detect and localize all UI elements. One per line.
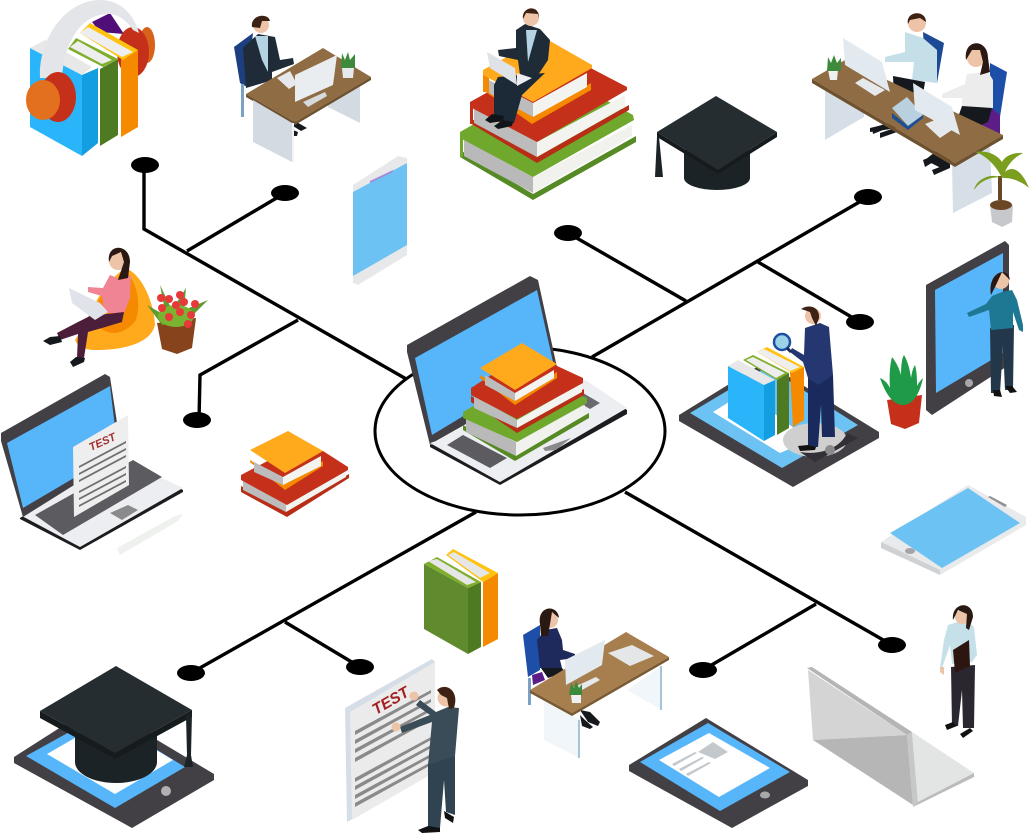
icon: standing woman with folder [940, 605, 977, 738]
icon: graduation cap [655, 96, 777, 190]
icon: test board with man [345, 659, 459, 833]
potted palm [974, 152, 1029, 227]
icon: graduation cap on tablet [14, 666, 214, 828]
icon: open laptop back [807, 667, 974, 807]
blue book [30, 40, 98, 156]
icon: big tablet with woman [926, 241, 1023, 415]
headband [40, 0, 139, 78]
orange book [483, 37, 592, 124]
icon: small book stack [241, 431, 349, 517]
icon: tablet with document [629, 718, 808, 828]
icon: plant in red pot [880, 355, 923, 429]
upright books [728, 347, 804, 441]
icon: book stack with reader [460, 8, 636, 200]
network connector lines [144, 165, 892, 673]
icon: potted flowers [147, 285, 208, 354]
icon: upright books green and orange [424, 549, 498, 654]
text: TEST on sheet: TEST [87, 431, 119, 454]
icon: smartphone upright [353, 156, 407, 285]
text: TEST on board: TEST [370, 683, 414, 718]
green book [460, 75, 636, 200]
icon: two people at desk [812, 13, 1029, 227]
icon: woman on beanbag [43, 248, 155, 367]
icon: man at desk [234, 16, 371, 162]
icon: pencil [117, 514, 183, 555]
green book [68, 38, 118, 146]
connector end nodes [131, 157, 906, 681]
icon: man on tablet with books [679, 306, 879, 487]
orange book [80, 23, 138, 137]
book stack in centre [463, 343, 589, 461]
red book [470, 52, 629, 163]
central circle with laptop and books [375, 276, 665, 515]
icon: books with headphones [26, 0, 155, 156]
icon: woman at desk [523, 608, 669, 758]
icon: laptop with test sheet [1, 374, 183, 550]
icon: smartphone flat [881, 485, 1026, 575]
